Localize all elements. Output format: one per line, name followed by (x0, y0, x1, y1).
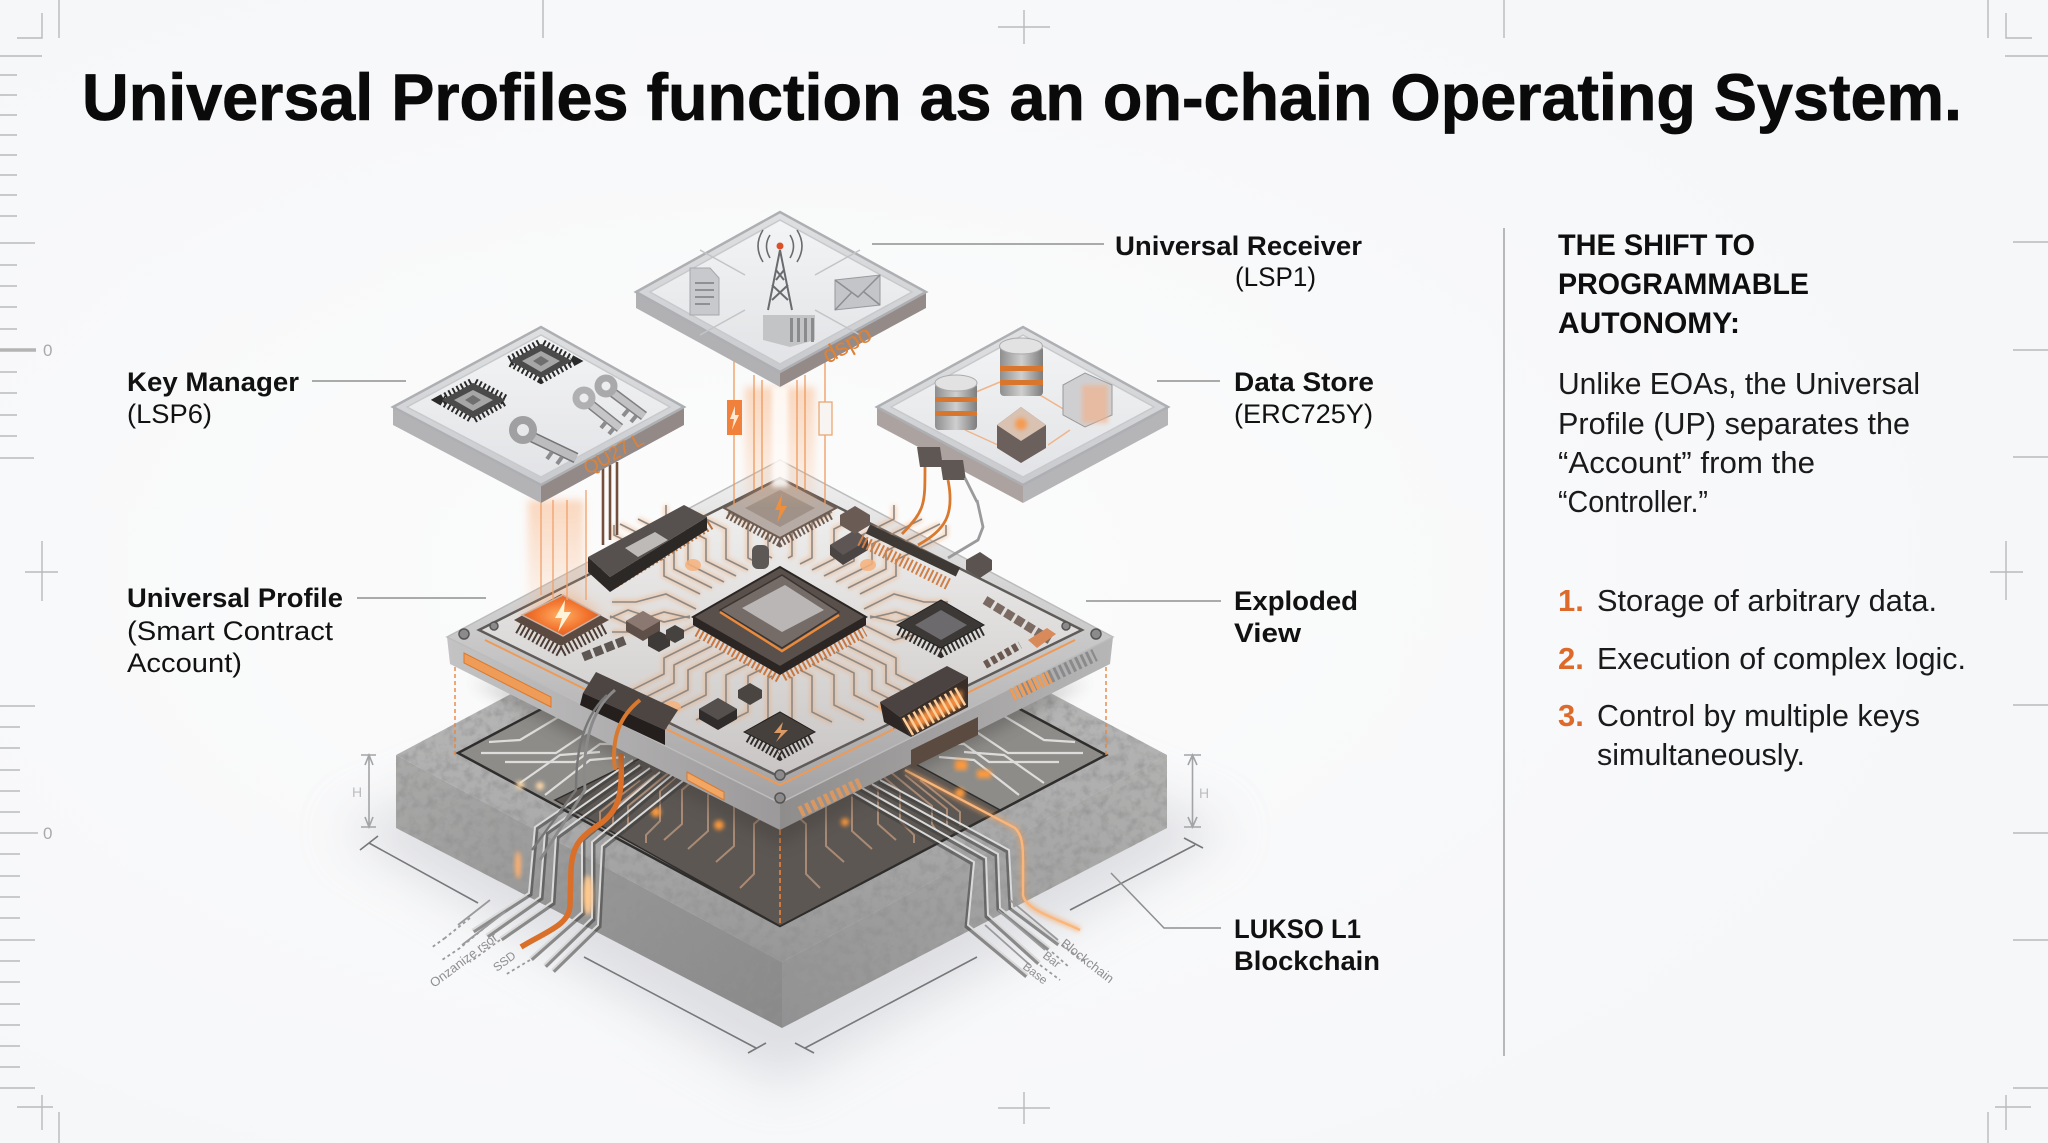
dimension label H right: H (1199, 785, 1209, 801)
right chip body (897, 600, 984, 648)
ruler zero mark top: 0 (43, 341, 52, 360)
light beams from key manager plate (528, 462, 617, 600)
plate left side (636, 292, 780, 387)
icon: badge lightning (730, 406, 739, 430)
icon: lightning bolt (555, 600, 571, 632)
side engraved text: dspo (818, 320, 876, 369)
dark wires (603, 462, 617, 545)
side slot left (464, 653, 551, 707)
panel heading: AUTONOMY: (1558, 307, 1740, 340)
connector left face (880, 702, 911, 737)
plate inner glass (407, 335, 670, 477)
concrete right face (782, 755, 1167, 1028)
label: Universal Receiver: (LSP1) (1235, 262, 1316, 292)
side slot front (687, 772, 724, 800)
board top plate (447, 460, 1113, 803)
list numbers (1558, 583, 1584, 733)
connector links (945, 382, 1070, 445)
orange power badge (727, 400, 742, 435)
label: Universal Receiver: Universal Receiver (1115, 231, 1363, 261)
glow on block left (583, 875, 593, 915)
panel paragraph: Profile (UP) separates the (1558, 406, 1910, 441)
orange cable left (521, 753, 621, 947)
side vents right (1012, 655, 1095, 695)
recess (458, 582, 1106, 926)
circuit traces glow (610, 505, 950, 729)
gray cable second (532, 695, 607, 850)
ruler zero mark bottom: 0 (43, 824, 52, 843)
floor traces left (600, 765, 770, 888)
beam lines (734, 350, 825, 505)
right channel traces (852, 780, 1060, 975)
CPU package (693, 567, 866, 667)
label: Universal Profile: Account) (127, 648, 242, 678)
data store connectors (917, 447, 943, 467)
orange line right core (905, 770, 1080, 930)
connector strip (860, 529, 958, 585)
ground shadow (340, 650, 1230, 1085)
isometric exploded stack illustration (340, 212, 1230, 1085)
label: Exploded View: View (1234, 618, 1302, 648)
small engraved ground text left second: SSD (490, 948, 519, 974)
connector recess (911, 717, 978, 768)
soft shadow beneath board (470, 680, 1090, 845)
recess metal traces left (481, 716, 630, 795)
connector top (880, 666, 968, 717)
strip pins (860, 540, 950, 585)
orange pads on traces (663, 559, 898, 713)
right square chip (897, 600, 984, 652)
label: Universal Profile (127, 583, 343, 678)
lower square chip (744, 712, 815, 756)
Universal Profile circuit board (447, 460, 1113, 860)
panel paragraph (1558, 366, 1920, 519)
CPU lid (720, 575, 839, 648)
concrete left face (396, 755, 782, 1028)
list numbers: 2. (1558, 641, 1584, 676)
label: Data Store: (ERC725Y) (1234, 399, 1373, 429)
upper socket chip (724, 478, 836, 542)
plate inner glass (650, 220, 912, 364)
panel paragraph: Unlike EOAs, the Universal (1558, 366, 1920, 401)
right chip die (915, 610, 967, 640)
side vents orange right (1012, 677, 1050, 695)
glow on block far left (515, 851, 521, 879)
strip body (868, 529, 958, 572)
board bolts (459, 622, 1101, 803)
floor traces right (790, 765, 960, 888)
icon: antenna tower (758, 230, 802, 310)
plate left side (877, 407, 1023, 503)
icon: database cylinder left (935, 375, 977, 430)
hot chip pins (518, 628, 606, 652)
label: Key Manager: (LSP6) (127, 399, 212, 429)
panel paragraph: “Account” from the (1558, 445, 1815, 480)
Key Manager plate (393, 327, 684, 503)
orange cable from connector (614, 700, 640, 770)
list numbers: 1. (1558, 583, 1584, 618)
panel heading (1558, 229, 1809, 340)
label: LUKSO L1 Blockchain: Blockchain (1234, 946, 1380, 976)
inner board orange trim (485, 640, 1075, 785)
concrete top face (396, 550, 1167, 962)
leader lines (312, 244, 1221, 928)
icon: secure chip two (442, 383, 505, 418)
panel: programmable autonomy (1558, 229, 1966, 772)
data wires (902, 467, 983, 558)
plate right side (780, 292, 926, 387)
main CPU (693, 567, 866, 676)
icon: stacked node cube (997, 407, 1046, 463)
channel trace shadows right (850, 782, 1058, 976)
label: Data Store (1234, 367, 1374, 429)
icon: key two (576, 390, 620, 434)
long IC side (588, 517, 707, 592)
panel heading: PROGRAMMABLE (1558, 268, 1809, 301)
plate top (877, 327, 1168, 485)
upper chip pins (728, 514, 832, 542)
light beams from receiver plate (727, 350, 832, 505)
center dashed line (779, 830, 781, 926)
CPU lower edge (693, 617, 866, 675)
small engraved ground text right third: Base (1020, 959, 1051, 987)
hot chip top (522, 595, 600, 636)
LUKSO L1 concrete block (396, 550, 1167, 1028)
small engraved ground text right second: Bar (1040, 948, 1063, 971)
list items (1597, 583, 1966, 772)
connector fins (907, 695, 963, 727)
hot chip base (514, 594, 609, 646)
white core (772, 387, 788, 487)
hot chip glow (522, 595, 600, 635)
orange dashed guide lines (455, 667, 1106, 755)
title: Universal Profiles function as an on-chain Operating System. (82, 60, 1962, 134)
central beam glow (745, 387, 815, 502)
list items: Control by multiple keys (1597, 698, 1920, 733)
hot orange chip (514, 594, 609, 652)
long IC pins (614, 522, 712, 582)
CPU pins (698, 630, 864, 676)
small engraved ground text right: Blockchain (1058, 936, 1117, 986)
connector fin glow (906, 690, 962, 730)
glowing hot spots (516, 760, 991, 830)
icon: document (690, 268, 719, 315)
lower chip pins (748, 738, 813, 756)
CPU orange edge (720, 612, 839, 651)
label: Exploded View: Exploded (1234, 586, 1358, 616)
plate left side (393, 407, 541, 503)
quadrant lines (700, 250, 860, 335)
label: Universal Profile: Universal Profile (127, 583, 343, 613)
small components (583, 506, 1056, 730)
vertical divider (1503, 228, 1505, 1056)
small engraved ground text left: Onzanize rsor (427, 929, 501, 990)
icon: stacked module (763, 315, 815, 347)
label: Universal Profile: (Smart Contract (127, 616, 334, 646)
orange glowing line right (905, 770, 1080, 930)
long IC top (588, 505, 707, 577)
plate inner glass (891, 335, 1154, 477)
label: LUKSO L1 Blockchain: LUKSO L1 (1234, 914, 1361, 944)
board right side (780, 637, 1113, 830)
ground dotted trace ends (431, 900, 1085, 980)
connector front face (900, 677, 968, 737)
icon: upper chip lightning (775, 494, 787, 523)
label: Exploded View (1234, 586, 1358, 648)
left connector block (532, 672, 678, 860)
CPU heat spreader (742, 585, 824, 632)
right connector block with glowing fins (880, 666, 978, 768)
side vents front (800, 782, 862, 812)
plate right side (1023, 407, 1168, 503)
left block front (580, 693, 665, 745)
beam lines (541, 490, 586, 600)
panel paragraph: “Controller.” (1558, 484, 1708, 519)
lower chip mark (774, 722, 788, 742)
upper chip base (724, 478, 836, 538)
label: Universal Receiver (1115, 231, 1363, 292)
left channel traces (472, 760, 684, 970)
dimension lines around the block (360, 755, 1203, 1053)
label: Key Manager: Key Manager (127, 367, 299, 397)
label: LUKSO L1 Blockchain (1234, 914, 1380, 976)
plate top (393, 327, 684, 485)
plate top (636, 212, 926, 372)
channel trace shadows left (474, 762, 686, 972)
lower chip body (744, 712, 815, 750)
dimension label H left: H (352, 784, 362, 800)
Data Store plate (877, 327, 1168, 558)
gray cable (540, 690, 615, 860)
icon: key three (513, 420, 576, 464)
panel heading: THE SHIFT TO (1558, 229, 1755, 262)
list items: simultaneously. (1597, 737, 1805, 772)
icon: key one (598, 378, 644, 422)
raised inner board (479, 478, 1082, 777)
board left side (447, 637, 780, 830)
label: Key Manager (127, 367, 299, 429)
list items: Execution of complex logic. (1597, 641, 1966, 676)
outlined badge (819, 402, 832, 435)
Universal Receiver plate (636, 212, 926, 387)
data store connector two (940, 460, 966, 480)
icon: envelope (835, 275, 880, 310)
right chip pins (899, 630, 983, 652)
list numbers: 3. (1558, 698, 1584, 733)
recess metal traces right (934, 716, 1083, 795)
upper chip inner (745, 490, 815, 527)
long dark IC (588, 505, 712, 592)
icon: glass cube (1063, 373, 1112, 427)
label: Data Store: Data Store (1234, 367, 1374, 397)
circuit traces (610, 505, 950, 729)
icon: secure chip one (510, 344, 572, 378)
beam glow (528, 500, 584, 600)
long IC label (625, 532, 668, 557)
recess dark floor (555, 690, 1000, 926)
plate right side (541, 407, 684, 503)
list items: Storage of arbitrary data. (1597, 583, 1937, 618)
icon: database cylinder top (1000, 338, 1043, 396)
left block top (583, 672, 678, 730)
side engraved text: QU27 L (580, 429, 648, 479)
